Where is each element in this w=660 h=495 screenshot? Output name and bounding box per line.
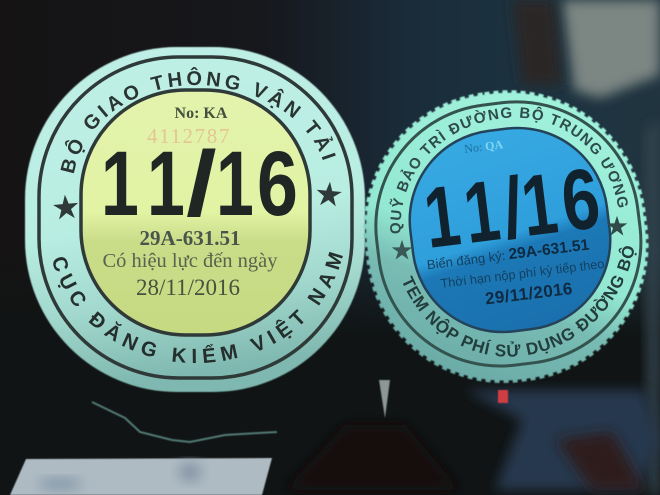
big date bbox=[419, 149, 605, 267]
serial label: No: KA bbox=[175, 105, 228, 122]
star left: ★ bbox=[391, 238, 413, 263]
cloud shade left bbox=[38, 478, 82, 490]
scalloped base bbox=[351, 77, 660, 396]
left sticker: Cục Đăng kiểm bbox=[24, 46, 366, 393]
right sticker: Quỹ bảo trì đường bộ bbox=[363, 90, 650, 384]
big date: / bbox=[498, 159, 528, 257]
scratched adhesive residue bbox=[92, 402, 277, 442]
big date: 6 bbox=[257, 132, 298, 235]
big date: 1 bbox=[216, 133, 254, 235]
lower dark area bbox=[264, 274, 660, 495]
big date: 1 bbox=[101, 133, 139, 235]
validity text: Có hiệu lực đến ngày bbox=[102, 250, 278, 272]
big date bbox=[101, 132, 298, 235]
ring text top: BỘ GIAO THÔNG VẬN TẢI bbox=[60, 67, 336, 174]
cloud shade centre bbox=[178, 462, 202, 482]
light streak bbox=[379, 380, 390, 418]
big date: 1 bbox=[419, 166, 465, 266]
light strip bottom left bbox=[10, 458, 272, 495]
plate number line: Biển đăng ký: 29A-631.51 bbox=[426, 236, 591, 273]
big date: 1 bbox=[147, 133, 185, 235]
payment deadline label: Thời hạn nộp phí kỳ tiếp theo bbox=[440, 257, 605, 291]
dark pillar reflection bbox=[512, 0, 562, 85]
serial label: No: QA bbox=[463, 137, 504, 156]
right edge reflection bbox=[645, 120, 660, 495]
inner blue panel bbox=[399, 118, 621, 342]
expiry date: 29/11/2016 bbox=[484, 279, 574, 308]
outer ring line bbox=[39, 57, 352, 378]
inner yellow panel bbox=[81, 90, 310, 335]
big date: 1 bbox=[516, 154, 562, 254]
big date: / bbox=[186, 132, 217, 235]
big date: 1 bbox=[459, 162, 505, 261]
outer ring line bbox=[362, 88, 655, 380]
star right: ★ bbox=[314, 179, 344, 211]
ring text bottom: CỤC ĐĂNG KIỂM VIỆT NAM bbox=[53, 252, 343, 363]
star right: ★ bbox=[606, 214, 628, 239]
red reflection bbox=[498, 390, 508, 403]
serial number: 4112787 bbox=[147, 124, 231, 148]
star left: ★ bbox=[51, 192, 81, 224]
blue reflection bottom right bbox=[465, 390, 660, 490]
expiry date: 28/11/2016 bbox=[136, 275, 240, 300]
sticker base bbox=[25, 47, 365, 392]
big date: 6 bbox=[556, 150, 605, 250]
big date and details rotated with the sticker bbox=[413, 126, 611, 315]
dark shape bottom centre bbox=[285, 425, 460, 490]
building reflection top right bbox=[562, 0, 660, 98]
ring text bottom: TEM NỘP PHÍ SỬ DỤNG ĐƯỜNG BỘ bbox=[403, 246, 637, 357]
brown reflection bottom right bbox=[557, 432, 645, 490]
plate number: 29A-631.51 bbox=[140, 226, 240, 250]
ring text top: QUỸ BẢO TRÌ ĐƯỜNG BỘ TRUNG ƯƠNG bbox=[390, 106, 628, 234]
